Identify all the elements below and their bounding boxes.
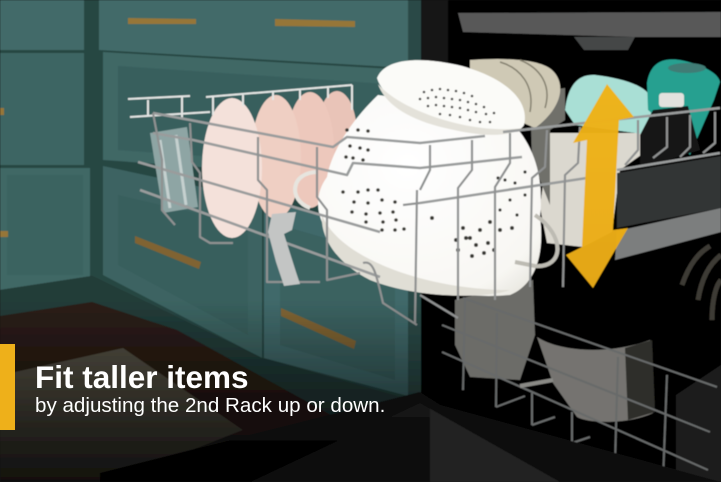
dishwasher interior [421,0,721,482]
colander right handle [515,215,558,266]
teal cup [647,59,720,155]
toe kick [0,276,400,420]
dark cup holder [640,106,700,168]
rug [0,348,243,482]
rack: lower wire basket [442,298,717,480]
caption [35,359,385,417]
rack adjuster panel [615,156,721,260]
white perforated plate on colander [377,60,525,135]
floor [0,276,420,482]
double-headed arrow [566,84,634,288]
steel pot [537,337,653,422]
lower right tub wall [676,365,721,482]
rack: vertical wires [153,112,715,325]
cap on holder [659,93,684,107]
mint cup [565,75,652,135]
glass jar [530,88,565,205]
lower rack white bowl [455,280,535,380]
wire rack [128,85,720,480]
glass tumbler [150,127,198,213]
caption subtext: by adjusting the 2nd Rack up or down. [35,394,385,417]
rack: back white rails [128,85,352,118]
bottom shade [0,300,430,482]
rack: front steel rails [138,108,720,277]
cabinet handles [0,18,356,349]
stacked plates behind colander [470,59,560,128]
rack: clip [268,212,300,286]
accent bar [0,344,15,430]
pink plates [202,91,357,238]
lower right plates [682,246,721,320]
colander [295,95,558,296]
caption heading: Fit taller items [35,359,249,395]
door bottom [100,392,721,482]
black pot lid [535,268,693,356]
colander left handle [295,172,318,208]
tall white stacked bowl [540,133,650,247]
upper spray shelf [458,12,721,50]
teal cup opening [668,63,706,73]
cabinets [0,0,430,400]
